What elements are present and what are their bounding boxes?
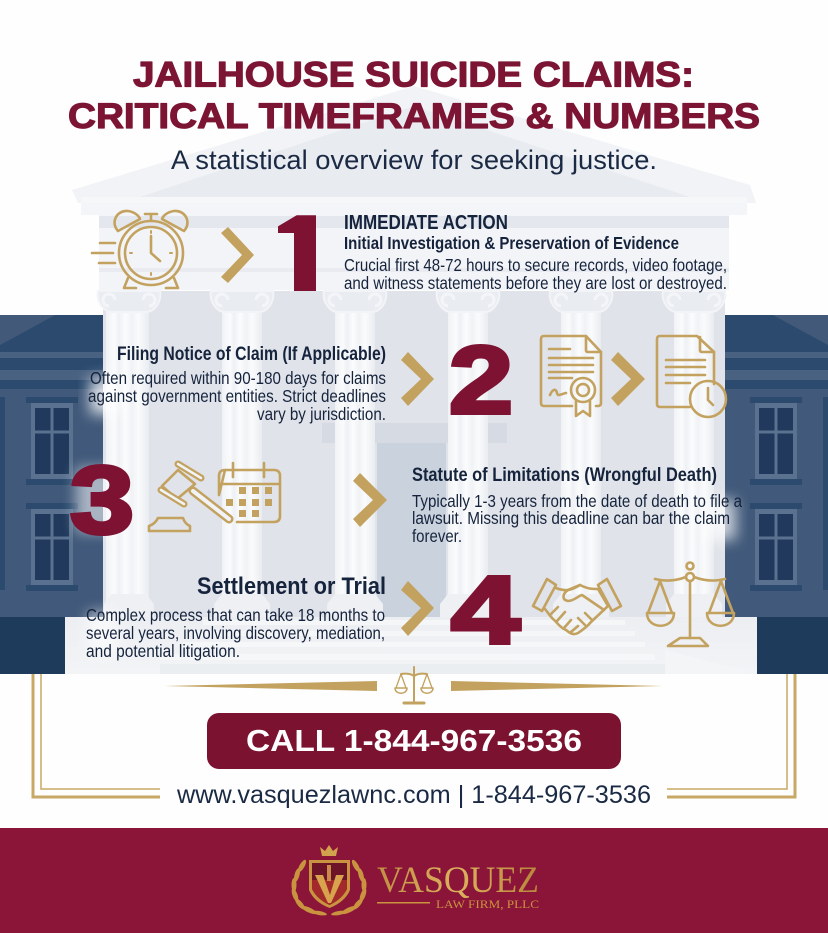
- right laurel: [331, 859, 368, 916]
- icon: small scale: [395, 667, 433, 703]
- step 4: settlement or trial: [86, 557, 734, 664]
- numeral 1: 1: [272, 198, 332, 308]
- left navy wing: [0, 315, 104, 674]
- icon: calendar: [219, 463, 280, 522]
- numeral 4: 4: [451, 557, 520, 664]
- step 3 text: forever.: [412, 526, 462, 546]
- step 4 text: Complex process that can take 18 months to: [86, 605, 385, 625]
- step 4 text: Settlement or Trial: [197, 573, 386, 600]
- step 2 text: against government entities. Strict deadlines: [88, 386, 386, 406]
- step 1 text: Initial Investigation & Preservation of Evidence: [344, 233, 679, 253]
- call button: CALL 1-844-967-3536: [246, 723, 582, 758]
- pediment: [72, 86, 756, 290]
- column shafts: [106, 312, 714, 604]
- wordmark: VASQUEZ: [377, 860, 539, 901]
- temple illustration backdrop: [0, 86, 828, 674]
- step 2 text: vary by jurisdiction.: [257, 404, 386, 424]
- step 2 text: Filing Notice of Claim (If Applicable): [117, 344, 386, 365]
- wordmark rule: [377, 902, 430, 904]
- icon: alarm clock: [92, 211, 187, 288]
- arrow: [611, 352, 645, 406]
- subtitle: A statistical overview for seeking justice.: [171, 145, 657, 175]
- call button: [207, 713, 621, 769]
- title: CRITICAL TIMEFRAMES & NUMBERS: [68, 96, 760, 136]
- step 3: statute of limitations: [70, 447, 742, 554]
- step 4 text: several years, involving discovery, mediation,: [86, 623, 385, 643]
- white glow behind overlapping text: [76, 378, 736, 654]
- left laurel: [290, 859, 327, 916]
- footer band: [0, 828, 828, 933]
- step 3 text: Typically 1-3 years from the date of death to file a: [412, 491, 742, 511]
- arrow: [353, 473, 387, 527]
- step 1 text: [344, 212, 727, 293]
- icon: document with clock: [657, 336, 726, 417]
- ornament divider with scale: [165, 667, 663, 703]
- contact line: www.vasquezlawnc.com | 1-844-967-3536: [176, 781, 651, 809]
- step 1 text: IMMEDIATE ACTION: [344, 212, 508, 234]
- icon: balance scale: [647, 562, 734, 646]
- numeral 2: 2: [449, 327, 513, 434]
- step 2: filing notice of claim: [88, 327, 726, 434]
- step 2 text: Often required within 90-180 days for claims: [90, 368, 386, 388]
- steps: [65, 617, 757, 674]
- title: JAILHOUSE SUICIDE CLAIMS:: [133, 54, 694, 94]
- arrow: [401, 352, 434, 406]
- step 4 text: [86, 573, 386, 661]
- title: [68, 54, 760, 136]
- logo: [290, 845, 539, 916]
- step 3 text: lawsuit. Missing this deadline can bar the claim: [412, 508, 730, 528]
- colonnade: [98, 291, 725, 617]
- step 1: immediate action: [90, 210, 726, 292]
- numeral 3: 3: [70, 447, 134, 554]
- step 3 text: Statute of Limitations (Wrongful Death): [412, 465, 717, 486]
- icon: handshake: [533, 579, 621, 634]
- ionic capitals: [98, 291, 725, 312]
- arrow: [221, 227, 254, 283]
- crest: [290, 845, 368, 916]
- wordmark subtitle: LAW FIRM, PLLC: [436, 899, 539, 911]
- column bases: [104, 594, 722, 617]
- step 3 text: [412, 465, 742, 546]
- icon: gavel: [149, 464, 229, 531]
- right navy wing: [725, 315, 828, 674]
- step 1 text: and witness statements before they are lost or destroyed.: [344, 273, 727, 293]
- step 1 text: Crucial first 48-72 hours to secure records, video footage,: [344, 255, 727, 275]
- icon: certificate document: [541, 336, 601, 416]
- gold frame: [33, 674, 795, 797]
- arrow: [401, 581, 434, 636]
- step 4 text: and potential litigation.: [86, 641, 240, 661]
- back wall and door: [103, 291, 725, 617]
- step 2 text: [88, 344, 386, 424]
